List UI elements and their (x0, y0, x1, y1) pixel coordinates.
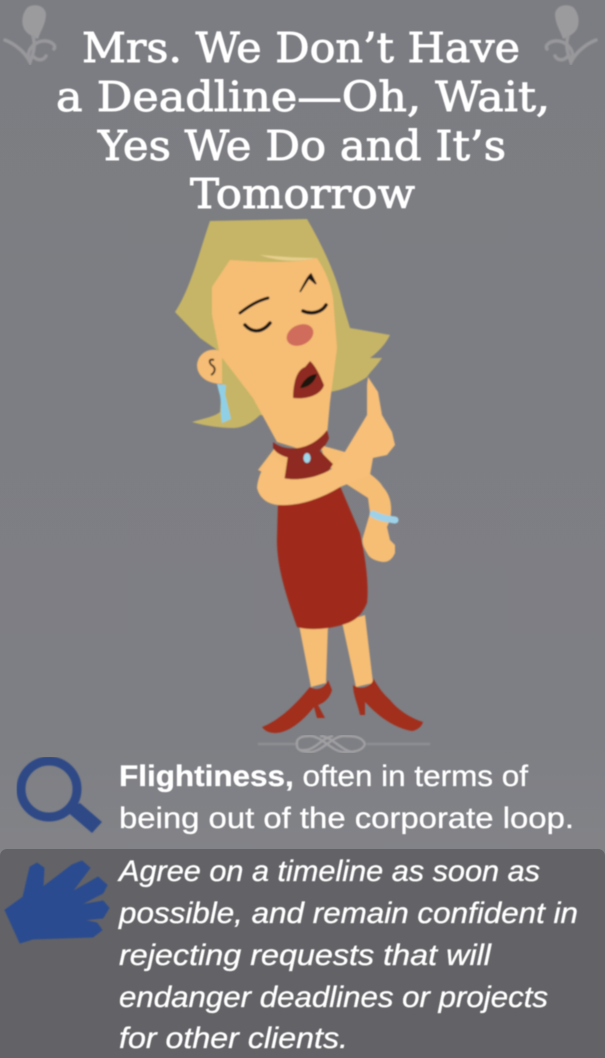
body copy: problem (119, 760, 574, 835)
pendant (304, 453, 310, 463)
left shoe (262, 680, 332, 733)
icon: hand (5, 861, 109, 943)
body copy: problem: Flightiness, often in terms of (119, 760, 529, 793)
chest (258, 445, 292, 482)
ornament: knot divider (258, 736, 430, 752)
neck and face (212, 258, 337, 450)
panel: advice (0, 849, 605, 1058)
hair highlight (260, 255, 316, 261)
body copy: advice: endanger deadlines or projects (119, 981, 548, 1014)
title: a Deadline—Oh, Wait, (56, 73, 550, 121)
halter top (284, 450, 333, 482)
right shoe (353, 678, 423, 731)
title: Mrs. We Don’t Have (82, 24, 520, 72)
body copy: problem: being out of the corporate loop. (119, 802, 574, 835)
earring (217, 384, 231, 423)
arm behind: right arm and hand (340, 462, 395, 562)
icon: magnifying glass (21, 761, 102, 833)
right eyebrow (300, 274, 316, 292)
body copy: advice: Agree on a timeline as soon as (117, 855, 540, 888)
title: Yes We Do and It’s (97, 122, 506, 170)
bracelet (373, 514, 395, 520)
back hair (175, 219, 390, 428)
right eye (303, 305, 326, 313)
legs (299, 625, 328, 687)
ornament: right flourish (546, 5, 596, 62)
dress (277, 486, 368, 629)
body copy: advice: rejecting requests that will (119, 939, 492, 972)
body copy: advice (117, 855, 578, 1055)
nose (283, 320, 317, 350)
left eye (245, 323, 270, 331)
illustration: woman (175, 219, 423, 733)
necklace collar (273, 430, 329, 460)
title: Tomorrow (190, 170, 415, 218)
ear (197, 350, 222, 384)
body copy: advice: possible, and remain confident in (118, 897, 578, 930)
mouth (293, 361, 324, 398)
left eyebrow (240, 298, 268, 313)
ornament: left flourish (5, 5, 55, 62)
body copy: advice: for other clients. (119, 1022, 348, 1055)
title (56, 24, 550, 218)
front arm (257, 377, 395, 505)
